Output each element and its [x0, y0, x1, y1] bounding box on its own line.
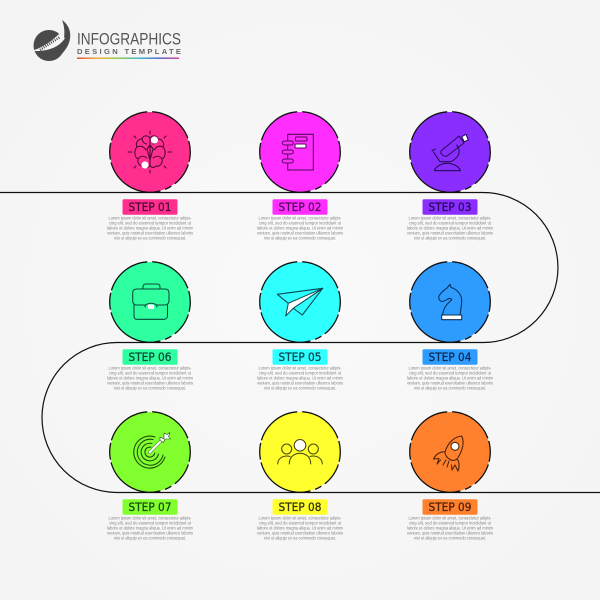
description: labore et dolore magna aliqua. Ut enim ad minim [407, 526, 493, 530]
description [407, 366, 493, 390]
step 07 [107, 410, 193, 540]
step 06: STEP 06 [128, 350, 172, 364]
description: veniam, quis nostrud exercitation ullamco laboris [257, 380, 343, 386]
description [257, 516, 343, 540]
step 09: STEP 09 [428, 500, 472, 514]
description: cing elit, sed do eiusmod tempor incididunt ut [409, 370, 492, 376]
circle [260, 412, 340, 492]
description: cing elit, sed do eiusmod tempor incididunt ut [109, 520, 192, 526]
description: Lorem ipsum dolor sit amet, consectetur adipis- [108, 516, 192, 520]
description: Lorem ipsum dolor sit amet, consectetur adipis- [108, 216, 192, 220]
logo [31, 20, 181, 61]
description: veniam, quis nostrud exercitation ullamco laboris [257, 530, 343, 536]
step 03 [407, 110, 493, 240]
description: cing elit, sed do eiusmod tempor incididunt ut [409, 520, 492, 526]
description: veniam, quis nostrud exercitation ullamco laboris [407, 230, 493, 236]
step label [422, 349, 478, 365]
circle [410, 412, 490, 492]
description: labore et dolore magna aliqua. Ut enim ad minim [257, 226, 343, 230]
logo title: INFOGRAPHICS [77, 30, 181, 48]
step label [422, 499, 478, 515]
description: cing elit, sed do eiusmod tempor incididunt ut [109, 220, 192, 226]
circle [410, 112, 490, 192]
description: labore et dolore magna aliqua. Ut enim ad minim [107, 526, 193, 530]
icon: chess knight [439, 284, 462, 320]
description: Lorem ipsum dolor sit amet, consectetur adipis- [408, 216, 492, 220]
description: nisi ut aliquip ex ea commodo consequat. [414, 236, 486, 240]
step label [422, 199, 478, 215]
description: labore et dolore magna aliqua. Ut enim ad minim [407, 376, 493, 380]
step label [122, 199, 178, 215]
circle [110, 262, 190, 342]
description: cing elit, sed do eiusmod tempor incididunt ut [259, 370, 342, 376]
description [407, 516, 493, 540]
icon: paper plane [277, 288, 323, 316]
description: cing elit, sed do eiusmod tempor incididunt ut [109, 370, 192, 376]
description: cing elit, sed do eiusmod tempor incididunt ut [259, 220, 342, 226]
timeline path [0, 192, 600, 492]
description: nisi ut aliquip ex ea commodo consequat. [114, 386, 186, 390]
step 02: STEP 02 [278, 200, 322, 214]
icon: brain [128, 131, 172, 173]
description: nisi ut aliquip ex ea commodo consequat. [264, 236, 336, 240]
description: cing elit, sed do eiusmod tempor incididunt ut [259, 520, 342, 526]
description [107, 516, 193, 540]
step 08 [257, 410, 343, 540]
logo subtitle: DESIGN TEMPLATE [77, 47, 181, 56]
step 06 [107, 260, 193, 390]
step label [272, 199, 328, 215]
description: labore et dolore magna aliqua. Ut enim ad minim [257, 376, 343, 380]
step label [122, 349, 178, 365]
circle [260, 112, 340, 192]
icon: notebook [282, 134, 313, 170]
icon: briefcase [133, 284, 169, 319]
description: nisi ut aliquip ex ea commodo consequat. [114, 236, 186, 240]
description: nisi ut aliquip ex ea commodo consequat. [114, 536, 186, 540]
description [257, 216, 343, 240]
description: labore et dolore magna aliqua. Ut enim ad minim [257, 526, 343, 530]
icon: microscope [432, 134, 468, 171]
step label [272, 349, 328, 365]
step 02 [257, 110, 343, 240]
logo icon [31, 20, 70, 61]
step 09 [407, 410, 493, 540]
description: Lorem ipsum dolor sit amet, consectetur adipis- [408, 366, 492, 370]
step 08: STEP 08 [278, 500, 322, 514]
description: nisi ut aliquip ex ea commodo consequat. [264, 536, 336, 540]
step 04: STEP 04 [428, 350, 472, 364]
description: labore et dolore magna aliqua. Ut enim ad minim [407, 226, 493, 230]
description [107, 216, 193, 240]
description: veniam, quis nostrud exercitation ullamco laboris [407, 380, 493, 386]
step 05 [257, 260, 343, 390]
description: veniam, quis nostrud exercitation ullamco laboris [107, 530, 193, 536]
description: nisi ut aliquip ex ea commodo consequat. [264, 386, 336, 390]
description: veniam, quis nostrud exercitation ullamco laboris [257, 230, 343, 236]
icon: three people [278, 440, 322, 464]
step 01 [107, 110, 193, 240]
description [407, 216, 493, 240]
circle [110, 412, 190, 492]
description: labore et dolore magna aliqua. Ut enim ad minim [107, 226, 193, 230]
step 01: STEP 01 [128, 200, 172, 214]
description [257, 366, 343, 390]
description: Lorem ipsum dolor sit amet, consectetur adipis- [108, 366, 192, 370]
description: Lorem ipsum dolor sit amet, consectetur adipis- [258, 366, 342, 370]
logo rainbow line [77, 58, 179, 59]
icon: rocket [434, 436, 463, 471]
description: nisi ut aliquip ex ea commodo consequat. [414, 536, 486, 540]
description: nisi ut aliquip ex ea commodo consequat. [414, 386, 486, 390]
description: Lorem ipsum dolor sit amet, consectetur adipis- [258, 516, 342, 520]
description: labore et dolore magna aliqua. Ut enim ad minim [107, 376, 193, 380]
description: veniam, quis nostrud exercitation ullamco laboris [107, 230, 193, 236]
description: veniam, quis nostrud exercitation ullamco laboris [407, 530, 493, 536]
description: Lorem ipsum dolor sit amet, consectetur adipis- [258, 216, 342, 220]
step 04 [407, 260, 493, 390]
step label [272, 499, 328, 515]
step 07: STEP 07 [128, 500, 172, 514]
description [107, 366, 193, 390]
description: veniam, quis nostrud exercitation ullamco laboris [107, 380, 193, 386]
circle [410, 262, 490, 342]
icon: target with arrow [134, 432, 170, 468]
step 05: STEP 05 [278, 350, 322, 364]
step label [122, 499, 178, 515]
description: cing elit, sed do eiusmod tempor incididunt ut [409, 220, 492, 226]
step 03: STEP 03 [428, 200, 472, 214]
circle [260, 262, 340, 342]
description: Lorem ipsum dolor sit amet, consectetur adipis- [408, 516, 492, 520]
circle [110, 112, 190, 192]
